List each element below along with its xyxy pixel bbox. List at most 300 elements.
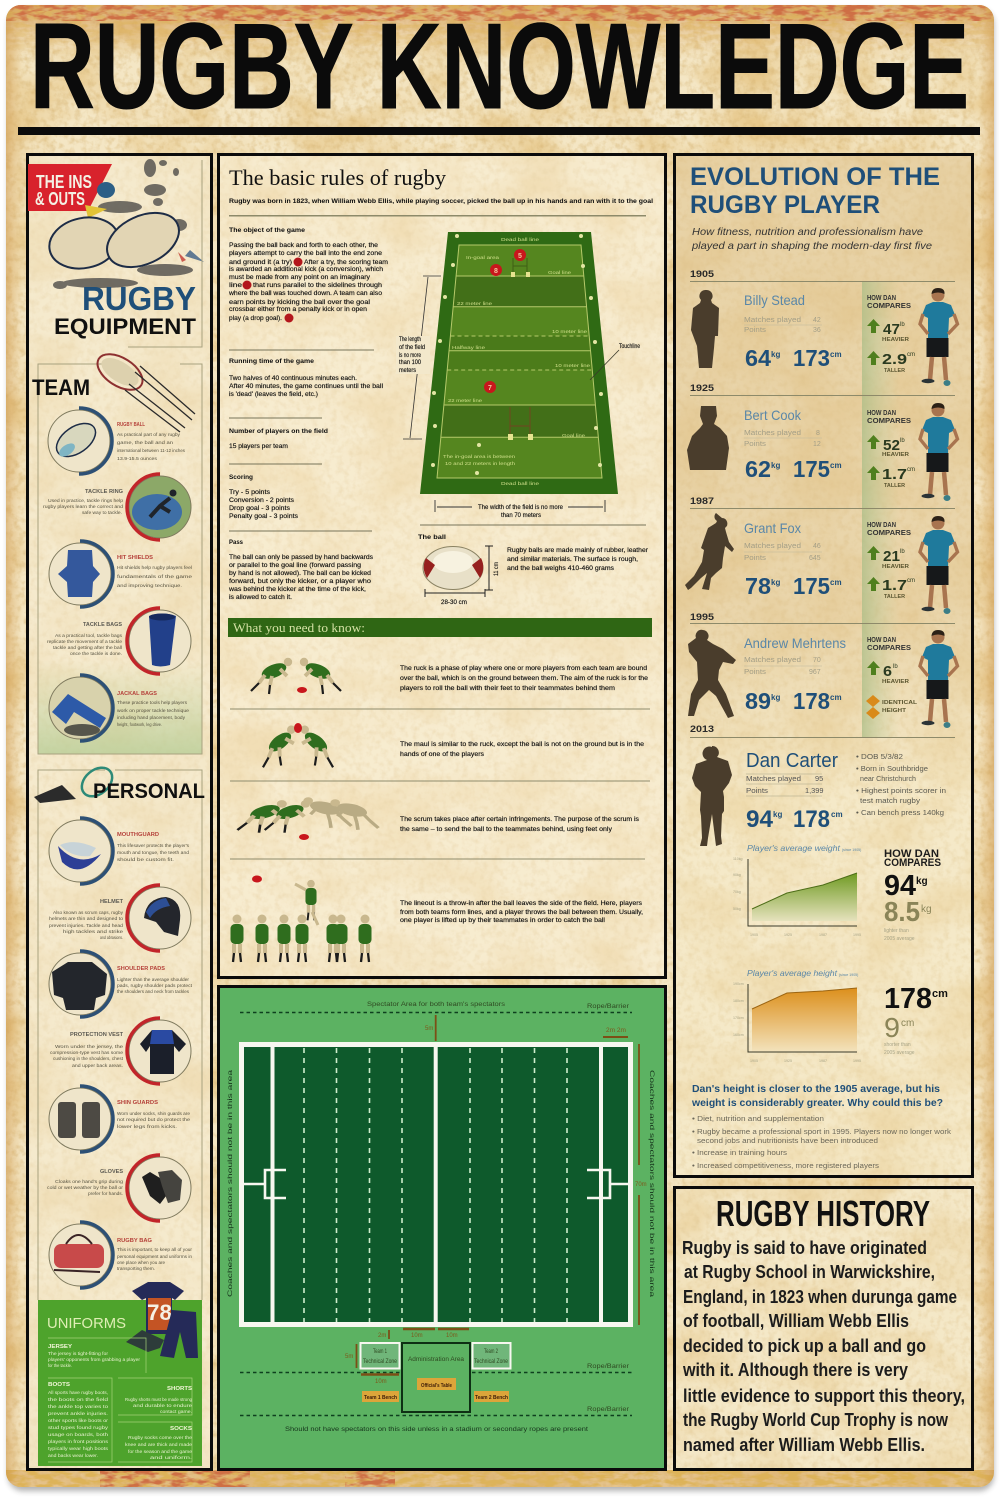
row: Billy Stead 1905: TALLER bbox=[884, 368, 905, 374]
item: rugby bag: personal equipment and uniforms in bbox=[117, 1254, 193, 1259]
reasons list: • Increased competitiveness, more registered players bbox=[692, 1163, 880, 1170]
item: hit shields bbox=[49, 541, 193, 607]
item: tackle bags: tackle and getting after the ball bbox=[53, 645, 122, 650]
callout: how dan compares weight: 2005 average bbox=[884, 936, 915, 942]
text: ruck bbox=[400, 665, 648, 692]
chart: average weight: Player's average weight bbox=[747, 843, 841, 853]
touchline callout bbox=[590, 343, 640, 380]
facts list: • Highest points scorer in bbox=[856, 788, 946, 795]
personal frame bbox=[38, 770, 202, 1300]
text: scoring bbox=[229, 474, 299, 520]
text: scoring: Penalty goal - 3 points bbox=[229, 513, 299, 520]
row: Andrew Mehrtens 1995 bbox=[688, 612, 958, 728]
subtitle: How fitness, nutrition and professionalism have bbox=[692, 226, 923, 238]
chart: average height: 160cm bbox=[733, 1033, 744, 1037]
item: jackal bags: work on proper tackle technique bbox=[117, 708, 190, 713]
text block: history: England, in 1823 when durunga game bbox=[683, 1287, 957, 1307]
row: Andrew Mehrtens 1995: 6 bbox=[883, 663, 892, 680]
reasons list: • Rugby became a professional sport in 1995. Players now no longer work bbox=[692, 1129, 952, 1136]
text: running time: After 40 minutes, the game continues until the ball bbox=[229, 383, 384, 390]
row: Bert Cook 1925: 52 bbox=[883, 437, 900, 454]
text: maul: The maul is similar to the ruck, except the ball is not on the ground but is in the bbox=[400, 741, 644, 748]
text: scoring: Scoring bbox=[229, 474, 253, 481]
width dimension: than 70 meters bbox=[501, 512, 542, 519]
text: lineout: The lineout is a throw-in after the ball leaves the side of the field. Here, players bbox=[400, 900, 643, 907]
item: shin guards: Worn under socks, shin guards are bbox=[117, 1111, 191, 1116]
row: Billy Stead 1905: lb bbox=[900, 322, 905, 328]
bar: what you need to know: What you need to know: bbox=[233, 620, 365, 635]
intro line: Rugby was born in 1823, when William Webb Ellis, while playing soccer, picked the ball up in his hands and ran with it to the goal bbox=[229, 198, 653, 205]
row: Grant Fox 1987: 1987 bbox=[690, 496, 714, 507]
chart: average height: Player's average height bbox=[747, 968, 838, 978]
callout: how dan compares weight: kg bbox=[916, 876, 928, 887]
length dimension: than 100 bbox=[399, 359, 421, 366]
item: protection vest: compression-type vest has some bbox=[50, 1050, 124, 1055]
team 1 bench: Team 1 Bench bbox=[364, 1395, 397, 1401]
banner: the ins and outs: & OUTS bbox=[35, 189, 85, 209]
callout: how dan compares weight: 94 bbox=[884, 870, 916, 902]
row: Dan Carter 2013: 94 bbox=[746, 806, 774, 833]
chart: average height: 1987 bbox=[819, 1059, 827, 1063]
item: helmet bbox=[49, 885, 191, 951]
text: scrum: the same – to send the ball to the teammates behind, using feet only bbox=[400, 826, 613, 833]
row: Dan Carter 2013 bbox=[690, 724, 946, 846]
the ball: and the ball weighs 410-460 grams bbox=[507, 565, 615, 572]
item: hit shields: Hit shields help rugby players feel bbox=[117, 565, 192, 570]
team 2 bench bbox=[474, 1391, 509, 1402]
row: Andrew Mehrtens 1995: Andrew Mehrtens bbox=[744, 635, 846, 651]
callout: how dan compares weight: COMPARES bbox=[884, 857, 941, 869]
row: Grant Fox 1987: Matches played bbox=[744, 543, 801, 550]
text: scrum: The scrum takes place after certain infringements. The purpose of the scrum is bbox=[400, 816, 640, 823]
item: rugby bag: RUGBY BAG bbox=[117, 1238, 152, 1244]
icon: boots and ring bbox=[34, 762, 118, 803]
facts list: • Born in Southbridge bbox=[856, 766, 928, 773]
row: Grant Fox 1987: HOW DAN bbox=[867, 520, 896, 529]
text: socks bbox=[125, 1426, 193, 1460]
field labels: Dead ball line bbox=[501, 237, 539, 243]
item: rugby bag: transporting them. bbox=[117, 1266, 155, 1271]
chart: average height: 180cm bbox=[733, 999, 744, 1003]
text: ruck: The ruck is a phase of play where one or more players from each team are bound bbox=[400, 665, 647, 672]
text: object of the game: Passing the ball back and forth to each other, the bbox=[229, 242, 378, 249]
text: running time: is 'dead' (leaves the field, etc.) bbox=[229, 391, 318, 398]
text: maul bbox=[400, 741, 644, 758]
text: scoring: Conversion - 2 points bbox=[229, 497, 295, 504]
text: scoring: Drop goal - 3 points bbox=[229, 505, 291, 512]
field labels: 10 and 22 meters in length bbox=[445, 461, 515, 467]
row: Grant Fox 1987: kg bbox=[771, 578, 780, 587]
row: Bert Cook 1925: 1925 bbox=[690, 383, 715, 394]
chart: average weight: 1987 bbox=[819, 933, 827, 937]
row: Bert Cook 1925: HOW DAN bbox=[867, 408, 896, 417]
text: number of players: 15 players per team bbox=[229, 443, 289, 450]
row: Bert Cook 1925: 62 bbox=[745, 456, 771, 482]
callout: how dan compares height: 178 bbox=[884, 983, 932, 1015]
icon: pants bbox=[160, 1310, 198, 1358]
text: boots bbox=[48, 1382, 109, 1458]
text block: history: the Rugby World Cup Trophy is now bbox=[683, 1410, 949, 1430]
text block: history: named after William Webb Ellis. bbox=[683, 1435, 925, 1455]
row: Bert Cook 1925: TALLER bbox=[884, 483, 905, 489]
item: tackle bags: TACKLE BAGS bbox=[83, 622, 123, 628]
row: Bert Cook 1925: Bert Cook bbox=[744, 407, 802, 423]
title underline bbox=[18, 127, 980, 135]
item: helmet: prevent injuries. Tackle and head bbox=[49, 923, 124, 928]
banner: the ins and outs: THE INS bbox=[36, 172, 92, 192]
length dimension: is no more bbox=[399, 352, 421, 359]
item: protection vest: and upper back areas. bbox=[72, 1063, 123, 1068]
text: boots: BOOTS bbox=[48, 1382, 70, 1388]
icon: jersey 78: 78 bbox=[147, 1300, 172, 1325]
row: Andrew Mehrtens 1995: 89 bbox=[745, 688, 771, 714]
question: Dan's height is closer to the 1905 average, but his bbox=[692, 1083, 940, 1095]
row: Bert Cook 1925: cm bbox=[907, 467, 915, 473]
heading: evolution: EVOLUTION OF THE bbox=[690, 163, 940, 191]
the ball: and similar materials. The surface is rough, bbox=[507, 556, 638, 563]
the ball: 28-30 cm bbox=[441, 599, 467, 606]
row: Billy Stead 1905: 173 bbox=[793, 345, 830, 371]
field labels: Goal line bbox=[562, 433, 585, 439]
heading: rugby equipment bbox=[54, 280, 197, 339]
heading: basic rules: The basic rules of rugby bbox=[229, 165, 446, 190]
width dimension: The width of the field is no more bbox=[478, 504, 563, 511]
callout: how dan compares height: cm bbox=[901, 1018, 914, 1029]
row: Billy Stead 1905: cm bbox=[907, 352, 915, 358]
row: Billy Stead 1905: Matches played bbox=[744, 317, 801, 324]
heading: rugby history: RUGBY HISTORY bbox=[716, 1193, 930, 1234]
measurement markers: 5m bbox=[345, 1354, 353, 1360]
item: hit shields: fundamentals of the game bbox=[117, 574, 193, 579]
row: Billy Stead 1905: 47 bbox=[883, 321, 900, 338]
text: pass: is allowed to catch it. bbox=[229, 594, 292, 601]
item: rugby bag: This is important, to keep all of your bbox=[117, 1247, 193, 1252]
row: Grant Fox 1987 bbox=[685, 496, 958, 614]
item: tackle bags: once the tackle is done. bbox=[70, 651, 122, 656]
text block: history: Rugby is said to have originated bbox=[682, 1238, 927, 1258]
field diagram bbox=[420, 232, 618, 494]
silhouette bbox=[691, 290, 719, 368]
measurement markers: 2m 2m bbox=[606, 1028, 626, 1034]
text: boots: usage on boards, both bbox=[48, 1432, 109, 1437]
team 2 technical zone: Technical Zone bbox=[474, 1358, 508, 1365]
subtitle: played a part in shaping the modern-day first five bbox=[691, 240, 932, 252]
text: socks: and uniform. bbox=[150, 1455, 192, 1460]
row: Andrew Mehrtens 1995: 967 bbox=[809, 669, 821, 676]
subtitle bbox=[691, 226, 932, 252]
item: shoulder pads: SHOULDER PADS bbox=[117, 966, 166, 972]
item: mouthguard bbox=[49, 818, 190, 884]
item: jackal bags: including hand placement, body bbox=[117, 715, 186, 720]
length dimension: meters bbox=[399, 367, 417, 374]
row: Billy Stead 1905: 42 bbox=[813, 317, 821, 324]
row: Andrew Mehrtens 1995: IDENTICAL bbox=[882, 700, 918, 706]
callout: how dan compares weight bbox=[884, 848, 941, 942]
item: shoulder pads: pads, rugby shoulder pads protect bbox=[117, 983, 193, 988]
item: helmet: high tackles and strike bbox=[63, 929, 124, 934]
measurement markers: 2m bbox=[378, 1333, 386, 1339]
chart: average weight: 1905 bbox=[750, 933, 758, 937]
chart: average height: 1925 bbox=[784, 1059, 792, 1063]
the ball bbox=[418, 534, 649, 606]
heading: uniforms: UNIFORMS bbox=[47, 1315, 126, 1332]
item: mouthguard: should be custom fit. bbox=[117, 857, 174, 862]
icon: flying ball bbox=[91, 347, 195, 432]
the ball: 11 cm bbox=[493, 562, 500, 576]
text: object of the game: must be made from any point on an imaginary bbox=[229, 274, 371, 281]
team 1 bench bbox=[362, 1391, 399, 1402]
text: socks: for the season and the game bbox=[128, 1449, 193, 1454]
row: Dan Carter 2013: 1,399 bbox=[805, 786, 824, 795]
row: Billy Stead 1905: Points bbox=[744, 327, 767, 334]
splatter behind the balls bbox=[53, 159, 204, 289]
reasons list: • Increase in training hours bbox=[692, 1150, 788, 1157]
callout: how dan compares height: 9 bbox=[884, 1012, 900, 1043]
chart: average height bbox=[733, 968, 861, 1063]
row: Billy Stead 1905: 36 bbox=[813, 327, 821, 334]
text: shorts bbox=[125, 1386, 193, 1414]
illustration: ruck bbox=[251, 658, 341, 694]
question bbox=[691, 1083, 943, 1109]
text: jersey: for the tackle. bbox=[48, 1363, 72, 1368]
text: boots: and backs wear lower. bbox=[48, 1453, 98, 1458]
field labels: Halfway line bbox=[452, 345, 485, 351]
text: socks: knee and are thick and made bbox=[125, 1442, 193, 1447]
row: Andrew Mehrtens 1995: 178 bbox=[793, 688, 830, 714]
text: boots: stud types found rugby bbox=[48, 1425, 109, 1430]
row: Andrew Mehrtens 1995: Points bbox=[744, 669, 767, 676]
row: Andrew Mehrtens 1995: 1995 bbox=[690, 612, 715, 623]
row: Grant Fox 1987: Grant Fox bbox=[744, 520, 801, 536]
text block: history: with it. Although there is very bbox=[682, 1360, 908, 1380]
rope barriers: Rope/Barrier bbox=[587, 1406, 630, 1413]
measurement markers: 10m bbox=[375, 1379, 387, 1385]
callout: how dan compares height: cm bbox=[932, 988, 948, 1000]
chart: average height: 170cm bbox=[733, 1016, 744, 1020]
text: object of the game: where the ball was touched down. A team can also bbox=[228, 290, 382, 297]
measurement markers: 10m bbox=[446, 1333, 458, 1339]
item: rugby ball: 13.9-15.5 ounces bbox=[117, 456, 158, 461]
label: spectator area: Spectator Area for both team's spectators bbox=[367, 1001, 506, 1008]
chart: average weight: (since 1905) bbox=[842, 848, 861, 852]
row: Grant Fox 1987: 645 bbox=[809, 555, 821, 562]
text: object of the game: play (a drop goal). bbox=[229, 315, 282, 322]
field labels: 10 meter line bbox=[552, 329, 587, 335]
rope barriers bbox=[240, 1003, 632, 1416]
team 1 technical zone: Team 1 bbox=[373, 1348, 387, 1355]
row: Bert Cook 1925: 12 bbox=[813, 441, 821, 448]
callout: how dan compares height: 2005 average bbox=[884, 1050, 915, 1056]
row: Grant Fox 1987: 21 bbox=[883, 548, 900, 565]
row: Dan Carter 2013: 95 bbox=[815, 774, 823, 783]
row: Grant Fox 1987: TALLER bbox=[884, 594, 905, 600]
text: boots: the boots on the field bbox=[48, 1397, 109, 1402]
team 1 technical zone bbox=[360, 1343, 400, 1368]
row: Billy Stead 1905 bbox=[690, 269, 958, 386]
field labels: Goal line bbox=[548, 270, 571, 276]
callout: how dan compares weight: lighter than bbox=[884, 928, 909, 934]
field labels: Dead ball line bbox=[501, 481, 539, 487]
text: pass: Pass bbox=[229, 539, 243, 546]
row: Grant Fox 1987: 175 bbox=[793, 573, 830, 599]
item: protection vest: Worn under the jersey, the bbox=[55, 1044, 124, 1049]
administration area: Administration Area bbox=[408, 1356, 464, 1363]
chart: average weight: 90kg bbox=[733, 873, 741, 877]
item: protection vest: cushioning in the shoulders, chest bbox=[53, 1056, 124, 1061]
row: Bert Cook 1925: kg bbox=[771, 461, 780, 470]
left sideline note: Coaches and spectators should not be in this area bbox=[227, 1070, 234, 1297]
text: pass: The ball can only be passed by hand backwards bbox=[229, 554, 374, 561]
text: lineout bbox=[400, 900, 643, 924]
item: shin guards bbox=[49, 1086, 191, 1152]
row: Grant Fox 1987: 78 bbox=[745, 573, 771, 599]
field labels: 22 meter line bbox=[457, 301, 492, 307]
field labels: 22 meter line bbox=[448, 398, 482, 404]
callout: how dan compares height bbox=[884, 983, 948, 1056]
heading: team: TEAM bbox=[32, 375, 90, 400]
touchline callout: Touchline bbox=[619, 343, 640, 350]
text: boots: the ankle top varies to bbox=[48, 1404, 109, 1409]
bar: what you need to know bbox=[228, 618, 652, 637]
item: mouthguard: MOUTHGUARD bbox=[117, 832, 159, 838]
measurement markers: 10m bbox=[411, 1333, 423, 1339]
item: rugby bag: one place when you are bbox=[117, 1260, 166, 1265]
callout: how dan compares weight: HOW DAN bbox=[884, 848, 939, 860]
row: Grant Fox 1987: lb bbox=[900, 549, 905, 555]
panel: field layout bbox=[218, 986, 666, 1470]
item: jackal bags: JACKAL BAGS bbox=[117, 691, 158, 697]
text block: history: decided to pick up a ball and go bbox=[683, 1336, 926, 1356]
text: object of the game: line bbox=[229, 282, 242, 289]
row: Billy Stead 1905: COMPARES bbox=[867, 301, 911, 310]
chart: average weight: 1925 bbox=[784, 933, 792, 937]
row: Bert Cook 1925: Points bbox=[744, 441, 767, 448]
numbered markers bbox=[484, 249, 526, 393]
text block: history: at Rugby School in Warwickshire, bbox=[684, 1262, 935, 1282]
chart: average weight: 1995 bbox=[853, 933, 861, 937]
row: Dan Carter 2013: Matches played bbox=[746, 774, 801, 783]
row: Dan Carter 2013: 178 bbox=[793, 806, 830, 833]
item: rugby ball bbox=[48, 408, 186, 474]
text: boots: All sports have rugby boots, bbox=[48, 1390, 108, 1395]
item: helmet: HELMET bbox=[100, 899, 123, 905]
team frame bbox=[38, 364, 202, 754]
item: shin guards: not required but do protect the bbox=[117, 1117, 191, 1122]
question: weight is considerably greater. Why could this be? bbox=[691, 1097, 943, 1109]
facts list bbox=[856, 754, 946, 817]
facts list: • Can bench press 140kg bbox=[856, 810, 944, 817]
icon: two rugby balls bbox=[45, 202, 188, 278]
chart: average height: 1905 bbox=[750, 1059, 758, 1063]
item: tackle ring: TACKLE RING bbox=[85, 489, 123, 495]
numbered markers: 5 bbox=[518, 253, 522, 260]
text: boots: other sports like boots or bbox=[48, 1418, 109, 1423]
row: Andrew Mehrtens 1995: cm bbox=[830, 693, 842, 702]
text: object of the game: crossbar either from a penalty kick or in open bbox=[229, 306, 367, 313]
panel: evolution of the rugby player bbox=[674, 154, 972, 1176]
text: running time bbox=[229, 358, 384, 398]
heading: rugby equipment: EQUIPMENT bbox=[54, 314, 197, 339]
illustration: maul bbox=[254, 723, 342, 770]
row: Grant Fox 1987: cm bbox=[907, 578, 915, 584]
row: Dan Carter 2013: 2013 bbox=[690, 724, 714, 735]
chart: average height: 190cm bbox=[733, 982, 744, 986]
row: Dan Carter 2013: Points bbox=[746, 786, 768, 795]
text: object of the game: is awarded an additional kick (a conversion), which bbox=[229, 266, 383, 273]
item: rugby ball: As practical part of any rugby bbox=[117, 432, 181, 437]
heading: evolution bbox=[690, 163, 940, 219]
row: Andrew Mehrtens 1995: HEIGHT bbox=[882, 708, 907, 714]
measurement markers: 5m bbox=[425, 1026, 433, 1032]
text: jersey bbox=[48, 1344, 141, 1368]
row: Andrew Mehrtens 1995: kg bbox=[771, 693, 780, 702]
item: mouthguard: mouth and tongue, the teeth and bbox=[117, 850, 190, 855]
numbered markers: 8 bbox=[494, 268, 498, 275]
length dimension bbox=[396, 276, 441, 439]
row: Dan Carter 2013: kg bbox=[773, 810, 782, 819]
item: gloves: cold or wet weather by the ball or bbox=[47, 1185, 124, 1190]
the ball: Rugby balls are made mainly of rubber, leather bbox=[507, 547, 649, 554]
text: object of the game: that runs parallel to the sidelines through bbox=[253, 282, 382, 289]
row: Grant Fox 1987: cm bbox=[830, 578, 842, 587]
row: Billy Stead 1905: cm bbox=[830, 350, 842, 359]
item: helmet: Also known as scrum caps, rugby bbox=[53, 910, 124, 915]
row: Andrew Mehrtens 1995: HEAVIER bbox=[882, 679, 909, 685]
text: pass: forward, but only the kicker, or a player who bbox=[229, 578, 371, 585]
text block: history: little evidence to support this theory, bbox=[683, 1386, 965, 1406]
item: shoulder pads: Lighter than the average shoulder bbox=[117, 977, 190, 982]
chart: average weight: 70kg bbox=[733, 890, 741, 894]
silhouette bbox=[688, 630, 736, 718]
text: ruck: players to roll the ball with their feet to their teammates behind them bbox=[400, 685, 616, 692]
row: Billy Stead 1905: 1905 bbox=[690, 269, 715, 280]
item: gloves: Cloaks one hand's grip during bbox=[55, 1179, 124, 1184]
item: jackal bags: height, footwork, leg drive. bbox=[117, 722, 162, 727]
item: gloves bbox=[47, 1155, 191, 1221]
measurement markers: 70m bbox=[635, 1182, 647, 1188]
item: helmet: helmets are thin and designed to bbox=[49, 916, 124, 921]
item: shin guards: SHIN GUARDS bbox=[117, 1100, 159, 1106]
item: shoulder pads: the shoulders and neck from tackles bbox=[117, 989, 190, 994]
text: number of players: Number of players on the field bbox=[229, 428, 328, 435]
row: Bert Cook 1925: 175 bbox=[793, 456, 830, 482]
row: Andrew Mehrtens 1995: HOW DAN bbox=[867, 635, 896, 644]
heading: rugby equipment: RUGBY bbox=[82, 280, 196, 317]
row: Billy Stead 1905: kg bbox=[771, 350, 780, 359]
text: maul: hands of one of the players bbox=[400, 751, 485, 758]
text: running time: Two halves of 40 continuous minutes each. bbox=[229, 375, 357, 382]
row: Grant Fox 1987: 1.7 bbox=[882, 577, 907, 594]
rope barriers: Rope/Barrier bbox=[587, 1363, 630, 1370]
item: hit shields: HIT SHIELDS bbox=[117, 555, 154, 561]
row: Billy Stead 1905: 2.9 bbox=[882, 351, 907, 368]
text: shorts: Rugby shorts must be made strong bbox=[125, 1397, 193, 1402]
item: shin guards: lower legs from kicks. bbox=[117, 1124, 177, 1129]
text: object of the game: After a try, the scoring team bbox=[304, 259, 389, 266]
length dimension: of the field bbox=[399, 344, 425, 351]
row: Bert Cook 1925: lb bbox=[900, 438, 905, 444]
row: Grant Fox 1987: COMPARES bbox=[867, 528, 911, 537]
silhouette bbox=[685, 513, 734, 590]
row: Bert Cook 1925: COMPARES bbox=[867, 416, 911, 425]
row: Bert Cook 1925: Matches played bbox=[744, 430, 801, 437]
text: running time: Running time of the game bbox=[229, 358, 314, 365]
silhouette bbox=[687, 406, 729, 470]
text: jersey: players' opponents from grabbing a player bbox=[48, 1357, 141, 1362]
item: hit shields: and improving technique. bbox=[117, 583, 182, 588]
text: scrum bbox=[400, 816, 640, 833]
field labels: In-goal area bbox=[466, 255, 499, 261]
